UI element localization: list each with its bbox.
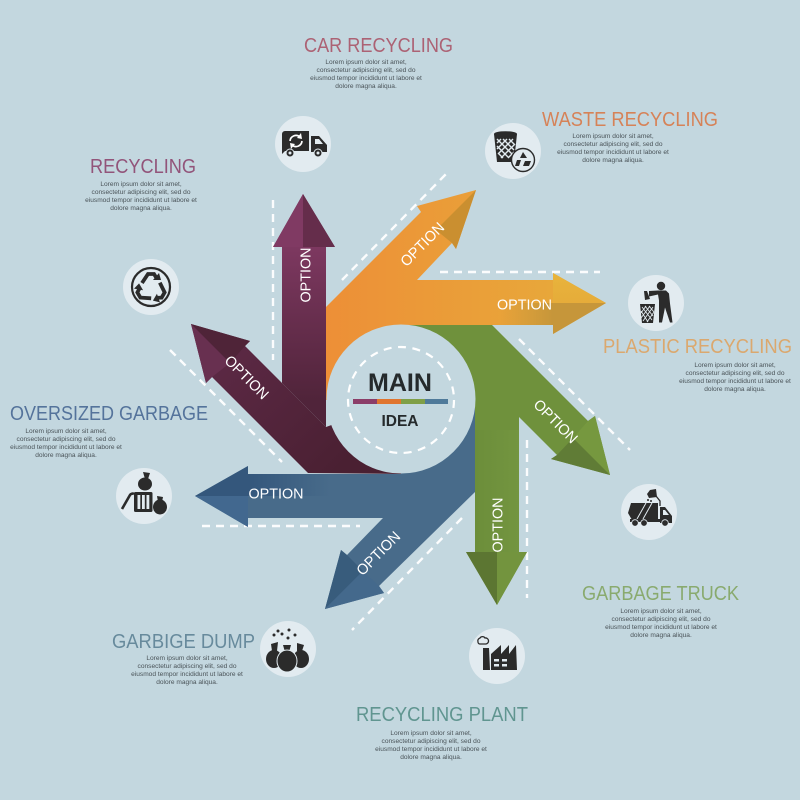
option labels: OPTION [248, 486, 304, 502]
text block: garbage truck: dolore magna aliqua. [630, 632, 692, 639]
arrows: garbage truck and recycling plant (green) [401, 325, 610, 605]
option labels: OPTION [490, 498, 506, 552]
text block: oversized garbage: OVERSIZED GARBAGE [10, 403, 208, 425]
option labels: OPTION [298, 248, 314, 302]
text block: plastic recycling: eiusmod tempor incididunt ut labore et [679, 378, 791, 385]
icon: factory [469, 628, 525, 684]
arrows: oversized garbage and garbige dump (blue) [195, 400, 475, 609]
icon: person throwing bottle in basket [628, 275, 684, 331]
text block: garbage truck: consectetur adipiscing elit, sed do [612, 616, 711, 623]
text block: garbage truck: eiusmod tempor incididunt ut labore et [605, 624, 717, 631]
option labels: OPTION [530, 396, 581, 447]
text block: garbige dump: Lorem ipsum dolor sit amet, [146, 655, 228, 662]
icon: waste basket with recycling badge [485, 123, 541, 179]
text block: garbige dump [112, 631, 255, 686]
text block: recycling: eiusmod tempor incididunt ut labore et [85, 197, 197, 204]
text block: car recycling: eiusmod tempor incididunt ut labore et [310, 75, 422, 82]
text block: waste recycling: dolore magna aliqua. [582, 157, 644, 164]
text block: recycling plant: Lorem ipsum dolor sit amet, [390, 730, 472, 737]
icon: garbage bags pile [260, 621, 316, 677]
text block: recycling: consectetur adipiscing elit, sed do [92, 189, 191, 196]
text block: recycling plant: eiusmod tempor incididunt ut labore et [375, 746, 487, 753]
text block: garbige dump: GARBIGE DUMP [112, 631, 255, 653]
option labels: OPTION [353, 528, 404, 579]
icon: garbage truck [621, 484, 677, 540]
text block: recycling plant [356, 704, 528, 761]
text block: plastic recycling: Lorem ipsum dolor sit amet, [694, 362, 776, 369]
text block: car recycling: consectetur adipiscing elit, sed do [317, 67, 416, 74]
text block: car recycling: Lorem ipsum dolor sit amet, [325, 59, 407, 66]
main idea circle [326, 324, 476, 474]
text block: plastic recycling: consectetur adipiscing elit, sed do [686, 370, 785, 377]
text block: plastic recycling: dolore magna aliqua. [704, 386, 766, 393]
text block: oversized garbage: consectetur adipiscing elit, sed do [17, 436, 116, 443]
text block: recycling: Lorem ipsum dolor sit amet, [100, 181, 182, 188]
text block: waste recycling [542, 109, 718, 164]
text block: waste recycling: Lorem ipsum dolor sit amet, [572, 133, 654, 140]
text block: garbage truck: GARBAGE TRUCK [582, 583, 740, 605]
arrow: recycling upper (purple) [273, 194, 335, 427]
text block: oversized garbage: Lorem ipsum dolor sit amet, [25, 428, 107, 435]
option labels [221, 219, 581, 579]
text block: oversized garbage: dolore magna aliqua. [35, 452, 97, 459]
icon: recycling truck [275, 116, 331, 172]
text block: garbage truck [582, 583, 740, 639]
main idea circle: MAIN [368, 369, 432, 397]
text block: garbage truck: Lorem ipsum dolor sit amet, [620, 608, 702, 615]
icon: recycling symbol [123, 259, 179, 315]
text block: car recycling: CAR RECYCLING [304, 35, 453, 57]
main idea circle: IDEA [381, 413, 419, 430]
text block: recycling plant: RECYCLING PLANT [356, 704, 528, 726]
text block: oversized garbage [10, 403, 208, 459]
text block: recycling plant: dolore magna aliqua. [400, 754, 462, 761]
text block: recycling: RECYCLING [90, 156, 196, 178]
text block: waste recycling: WASTE RECYCLING [542, 109, 718, 131]
text block: recycling plant: consectetur adipiscing elit, sed do [382, 738, 481, 745]
text block: recycling [85, 156, 197, 212]
text block: waste recycling: consectetur adipiscing elit, sed do [564, 141, 663, 148]
icon: overflowing trash can [116, 468, 172, 524]
option labels: OPTION [497, 296, 552, 314]
text block: car recycling [304, 35, 453, 90]
dashed guide lines [170, 172, 630, 630]
text block: plastic recycling [603, 336, 792, 393]
text block: recycling: dolore magna aliqua. [110, 205, 172, 212]
arrow: recycling lower (dark purple) [191, 324, 401, 474]
option labels: OPTION [397, 219, 448, 270]
text block: garbige dump: dolore magna aliqua. [156, 679, 218, 686]
text block: car recycling: dolore magna aliqua. [335, 83, 397, 90]
arrows: waste recycling and plastic recycling (orange) [326, 190, 606, 400]
text block: oversized garbage: eiusmod tempor incididunt ut labore et [10, 444, 122, 451]
text block: garbige dump: consectetur adipiscing elit, sed do [138, 663, 237, 670]
text block: waste recycling: eiusmod tempor incididunt ut labore et [557, 149, 669, 156]
text block: garbige dump: eiusmod tempor incididunt ut labore et [131, 671, 243, 678]
option labels: OPTION [221, 352, 272, 403]
